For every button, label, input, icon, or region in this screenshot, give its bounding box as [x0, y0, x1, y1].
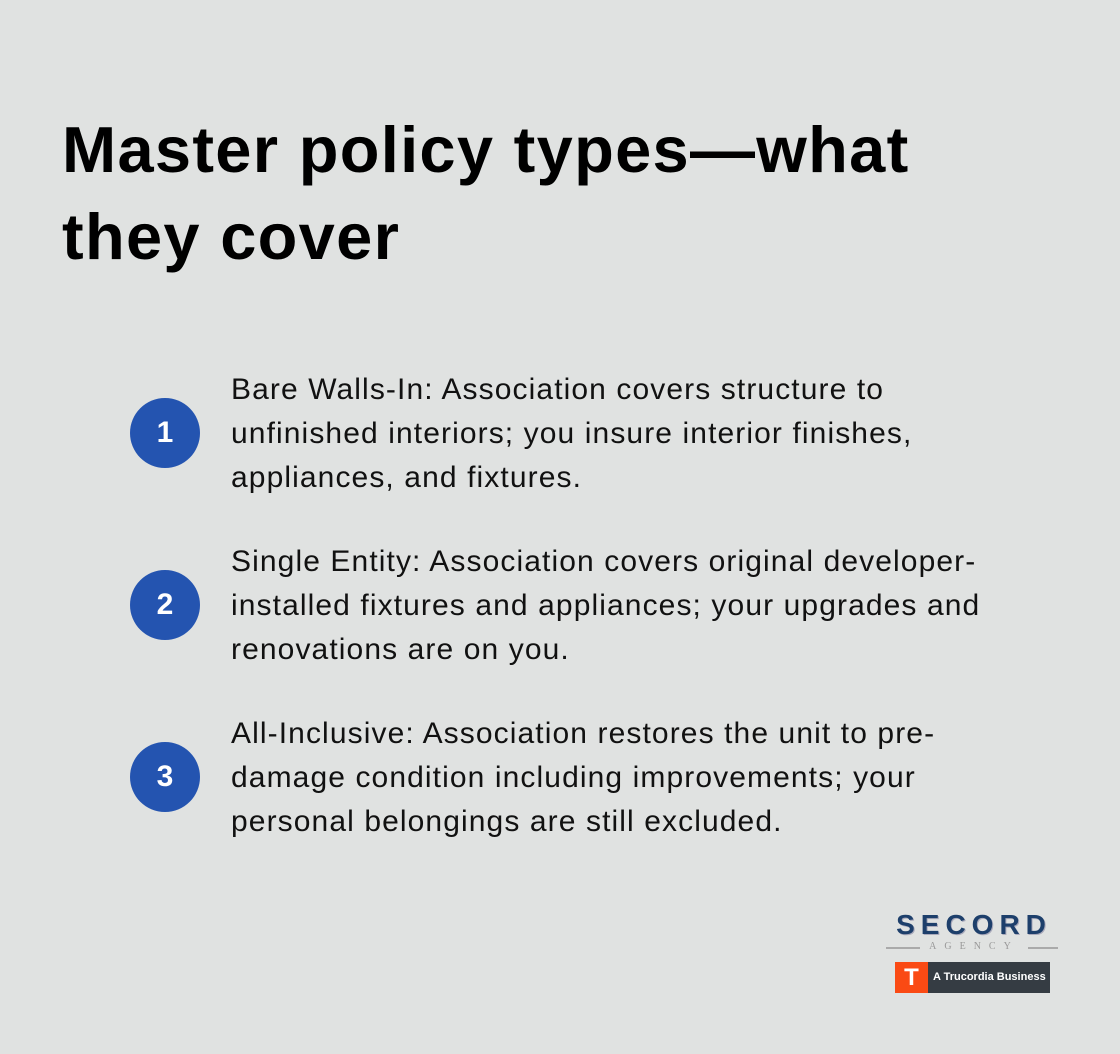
item 2 [130, 545, 980, 666]
text 1: appliances, and fixtures. [231, 461, 582, 494]
text 1 [231, 373, 912, 494]
text 3 [231, 717, 935, 838]
text 1: unfinished interiors; you insure interior finishes, [231, 417, 912, 450]
text 1: Bare Walls-In: Association covers structure to [231, 373, 884, 406]
logo: Trucordia badge: A Trucordia Business [933, 971, 1046, 983]
number badge 2: 2 [157, 588, 173, 621]
logo: SECORD wordmark: SECORD [896, 909, 1052, 940]
number badge 1 [130, 398, 200, 468]
text 2: renovations are on you. [231, 633, 570, 666]
number badge 3 [130, 742, 200, 812]
text 2: Single Entity: Association covers original developer- [231, 545, 976, 578]
text 2: installed fixtures and appliances; your upgrades and [231, 589, 980, 622]
title: Master policy types—what [62, 113, 910, 186]
text 3: damage condition including improvements; your [231, 761, 916, 794]
logo: Trucordia badge: T [904, 964, 919, 991]
title [62, 113, 910, 273]
number badge 3: 3 [157, 760, 173, 793]
text 2 [231, 545, 980, 666]
logo: agency line: AGENCY [929, 941, 1019, 952]
text 3: All-Inclusive: Association restores the unit to pre- [231, 717, 935, 750]
logo [886, 909, 1058, 993]
number badge 1: 1 [157, 416, 173, 449]
text 3: personal belongings are still excluded. [231, 805, 783, 838]
item 1 [130, 373, 912, 494]
number badge 2 [130, 570, 200, 640]
title: they cover [62, 200, 400, 273]
item 3 [130, 717, 935, 838]
logo: Trucordia badge [895, 962, 1050, 993]
